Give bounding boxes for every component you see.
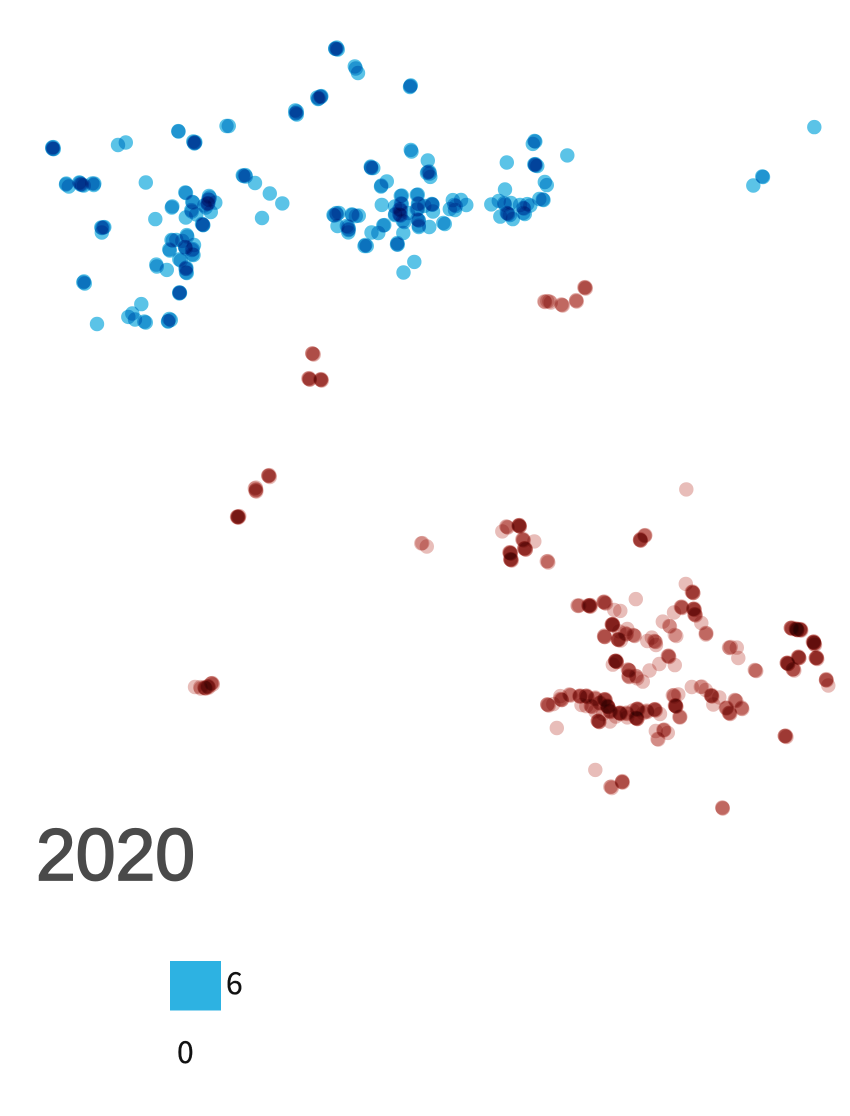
red dots: upper scatter	[188, 280, 694, 696]
blue dots: western cluster	[76, 185, 222, 331]
red dots: southern chain	[540, 679, 750, 816]
red dots: lower-right upper band	[570, 577, 764, 689]
blue dots: northern scatter	[45, 40, 418, 225]
blue dots: central cluster	[326, 143, 473, 280]
legend: 0	[177, 1028, 194, 1072]
red dots: middle cluster	[495, 518, 652, 570]
title: year: 2020	[36, 815, 195, 896]
legend	[170, 959, 243, 1072]
red dots: far-east cluster	[778, 620, 836, 744]
blue dots: eastern cluster	[484, 120, 822, 226]
legend: 6	[226, 959, 243, 1003]
